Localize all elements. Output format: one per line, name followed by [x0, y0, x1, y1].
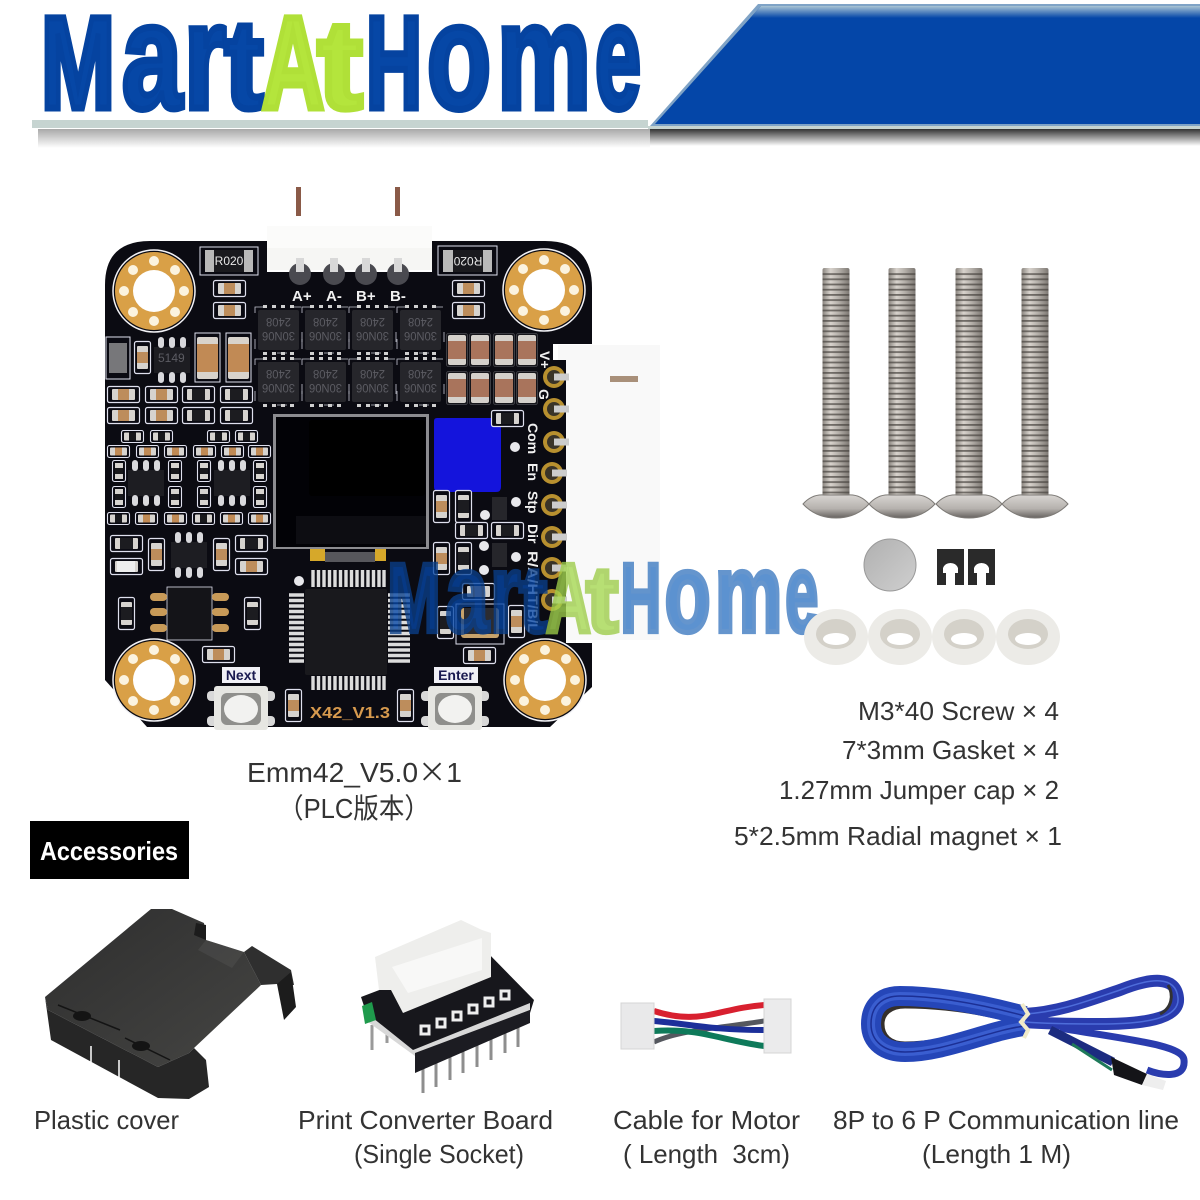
accessory labels: Cable for Motor	[613, 1105, 800, 1135]
signal pin labels	[525, 351, 553, 632]
hardware list	[734, 696, 1062, 851]
left component cluster: 5149	[158, 351, 185, 365]
accessory labels: (Single Socket)	[354, 1139, 524, 1169]
hardware list: M3*40 Screw × 4	[858, 696, 1059, 726]
jumper caps	[937, 549, 995, 585]
header logo: MartAtHome: t	[318, 0, 362, 135]
accessory labels	[34, 1105, 1179, 1169]
signal pin labels: Com	[525, 423, 541, 454]
product caption: Emm42_V5.0×1	[247, 751, 462, 791]
motor pin labels: B+	[356, 288, 376, 305]
Enter button	[421, 667, 489, 730]
OLED display	[273, 414, 429, 562]
hardware list: 5*2.5mm Radial magnet × 1	[734, 821, 1062, 851]
Enter button: Enter	[438, 667, 474, 683]
shunt resistors R020	[200, 246, 497, 275]
motor pin labels: A-	[326, 288, 342, 305]
signal pin labels: Stp	[525, 491, 541, 514]
right side white connector and pins	[541, 345, 660, 640]
watermark: MartAtHome: r	[490, 532, 520, 656]
signal pin labels: G	[536, 389, 552, 400]
watermark: MartAtHome: H	[621, 544, 661, 653]
MOSFET array	[255, 305, 444, 407]
signal pin labels: R/A/H	[525, 551, 541, 595]
motor pin labels	[292, 288, 406, 305]
watermark: MartAtHome: A	[546, 544, 591, 653]
hardware list: 7*3mm Gasket × 4	[842, 735, 1059, 765]
Next button	[207, 667, 275, 730]
motor pin labels: B-	[390, 288, 406, 305]
plastic cover	[45, 909, 296, 1099]
Accessories heading: Accessories	[40, 836, 178, 866]
gaskets	[804, 609, 1060, 665]
accessory labels: (Length 1 M)	[922, 1139, 1071, 1169]
header logo: MartAtHome: t	[225, 0, 263, 135]
ceramic capacitors	[446, 334, 538, 404]
mounting holes	[113, 249, 586, 721]
watermark: MartAtHome: M	[387, 544, 441, 653]
print converter board	[361, 920, 534, 1093]
right side resistors and transistors	[398, 410, 524, 722]
board version label: X42_V1.3	[310, 705, 390, 722]
Accessories heading	[30, 821, 189, 879]
product caption	[247, 751, 462, 824]
dual header with gold pins	[150, 587, 229, 640]
radial magnet	[864, 539, 916, 591]
PCB driver board	[105, 241, 592, 730]
motor pin row	[267, 248, 432, 285]
watermark: MartAtHome: e	[785, 532, 818, 656]
watermark: MartAtHome	[387, 532, 818, 656]
screws	[803, 268, 1068, 518]
Next button: Next	[226, 667, 257, 683]
accessory labels: ( Length 3cm)	[623, 1139, 790, 1169]
watermark: MartAtHome: m	[715, 532, 782, 656]
microcontroller with pins	[289, 570, 410, 690]
header logo: MartAtHome	[41, 0, 641, 140]
signal pin labels: En	[525, 463, 541, 481]
blue protective film	[434, 418, 501, 492]
left component cluster	[106, 280, 484, 722]
watermark: MartAtHome: t	[586, 548, 618, 652]
watermark: MartAtHome: o	[665, 532, 711, 656]
communication ribbon cable	[871, 981, 1184, 1090]
header banner: blue parallelogram with grey rule and drop shadow	[32, 4, 1200, 148]
shunt resistors R020: R020	[453, 254, 482, 268]
signal pin labels: T/B/L	[525, 596, 541, 632]
watermark: MartAtHome: t	[520, 548, 547, 652]
product caption: （PLC版本）	[278, 793, 430, 824]
motor pin labels: A+	[292, 288, 312, 305]
accessory labels: Print Converter Board	[298, 1105, 553, 1135]
hardware list: 1.27mm Jumper cap × 2	[779, 775, 1059, 805]
top motor connector	[267, 187, 432, 270]
accessory labels: 8P to 6 P Communication line	[833, 1105, 1179, 1135]
signal pin labels: V+	[537, 351, 553, 369]
signal pin labels: Dir	[525, 524, 541, 544]
motor cable	[621, 999, 791, 1053]
watermark: MartAtHome: a	[446, 532, 489, 656]
accessory labels: Plastic cover	[34, 1105, 179, 1135]
shunt resistors R020: R020	[215, 254, 244, 268]
